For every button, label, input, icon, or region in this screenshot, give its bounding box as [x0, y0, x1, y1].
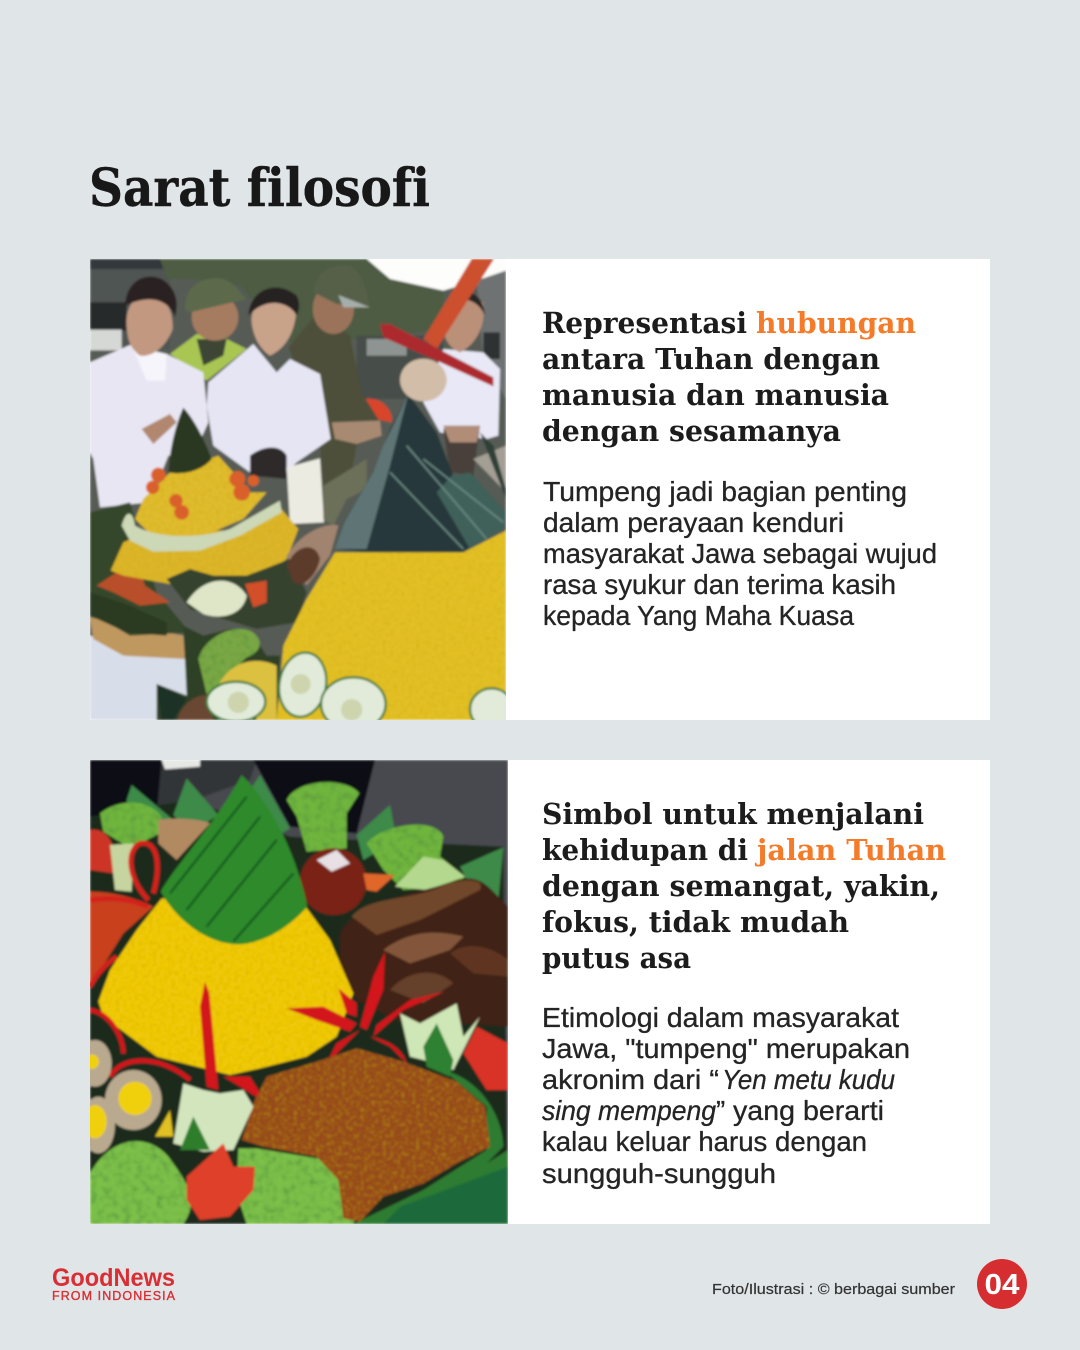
ball and skewer: [400, 359, 447, 401]
body text: etimologi: sing mempeng: [542, 1095, 717, 1126]
woman 1: [90, 345, 208, 507]
heading: hubungan: manusia dan manusia: [542, 378, 889, 412]
panel: hubungan: [90, 259, 990, 731]
body text: etimologi: sungguh-sungguh: [542, 1158, 776, 1189]
brown sambal bag: [300, 848, 367, 915]
body text: etimologi: Etimologi dalam masyarakat: [542, 1002, 899, 1033]
heading: hubungan: hubungan: [756, 306, 916, 340]
heading: hubungan: [542, 306, 916, 448]
body text: etimologi: Jawa, "tumpeng" merupakan: [542, 1033, 910, 1064]
heading: jalan Tuhan: jalan Tuhan: [754, 833, 946, 867]
heading: jalan Tuhan: Simbol untuk menjalani: [542, 797, 924, 831]
body text: kenduri: rasa syukur dan terima kasih: [543, 569, 896, 600]
tomatoes: [463, 1027, 508, 1090]
body text: kenduri: kepada Yang Maha Kuasa: [543, 600, 855, 631]
body text: etimologi: Yen metu kudu: [722, 1064, 895, 1095]
left chillies and tomato sauce: [90, 892, 153, 987]
red helmet: [363, 399, 392, 422]
logo: GoodNews from Indonesia: GoodNews: [52, 1264, 175, 1292]
lower greens: [157, 626, 280, 720]
page number badge: [977, 1259, 1027, 1309]
body text: etimologi: ”: [716, 1095, 725, 1126]
body text: kenduri: masyarakat Jawa sebagai wujud: [543, 538, 937, 569]
left tumpeng: [111, 507, 298, 589]
body text: etimologi: yang berarti: [733, 1095, 884, 1126]
heading: hubungan: antara Tuhan dengan: [542, 342, 880, 376]
title: Sarat filosofi: [89, 158, 430, 219]
heading: jalan Tuhan: fokus, tidak mudah: [542, 905, 849, 939]
body text: etimologi: [542, 1002, 910, 1189]
carved cucumbers: [173, 1083, 253, 1152]
body text: kenduri: [543, 476, 937, 631]
mid garnish: [167, 559, 307, 629]
page number badge: 04: [984, 1269, 1020, 1301]
heading: hubungan: Representasi: [542, 306, 747, 340]
woman 2: [207, 344, 331, 472]
body text: etimologi: kalau keluar harus dengan: [542, 1126, 867, 1157]
photo: tumpeng ceremony with women in white kebaya: [90, 259, 506, 720]
heading: jalan Tuhan: dengan semangat, yakin,: [542, 869, 940, 903]
body text: kenduri: dalam perayaan kenduri: [543, 507, 844, 538]
woman 3: [423, 349, 500, 439]
logo: GoodNews from Indonesia: [52, 1264, 176, 1303]
table and basket: [90, 636, 190, 720]
big rice cone: [277, 531, 506, 720]
heading: jalan Tuhan: putus asa: [542, 941, 691, 975]
cucumbers: [207, 649, 513, 731]
body text: kenduri: Tumpeng jadi bagian penting: [543, 476, 907, 507]
banana leaf underlay: [353, 1070, 508, 1224]
photo credit: Foto/Ilustrasi : © berbagai sumber: [712, 1281, 955, 1298]
card: [287, 458, 324, 524]
grilled chicken: [340, 878, 508, 1027]
logo: GoodNews from Indonesia: FROM INDONESIA: [52, 1289, 176, 1303]
body text: etimologi: akronim dari “: [542, 1064, 719, 1095]
chilli flowers: [200, 952, 445, 1103]
eggs: [78, 1040, 162, 1153]
soldier right: [288, 314, 378, 499]
banana leaf cap: [161, 775, 307, 944]
left garnish: [90, 502, 190, 636]
photo: yellow tumpeng with side dishes: [90, 760, 508, 1224]
yellow rice cone: [98, 898, 353, 1075]
heading: jalan Tuhan: [542, 797, 946, 975]
panel: jalan Tuhan: [78, 760, 990, 1224]
heading: jalan Tuhan: kehidupan di: [542, 833, 748, 867]
soldier left: [170, 334, 247, 381]
brown fried tempeh: [242, 1048, 490, 1222]
heading: hubungan: dengan sesamanya: [542, 414, 841, 448]
big leaf cone: [335, 394, 506, 552]
